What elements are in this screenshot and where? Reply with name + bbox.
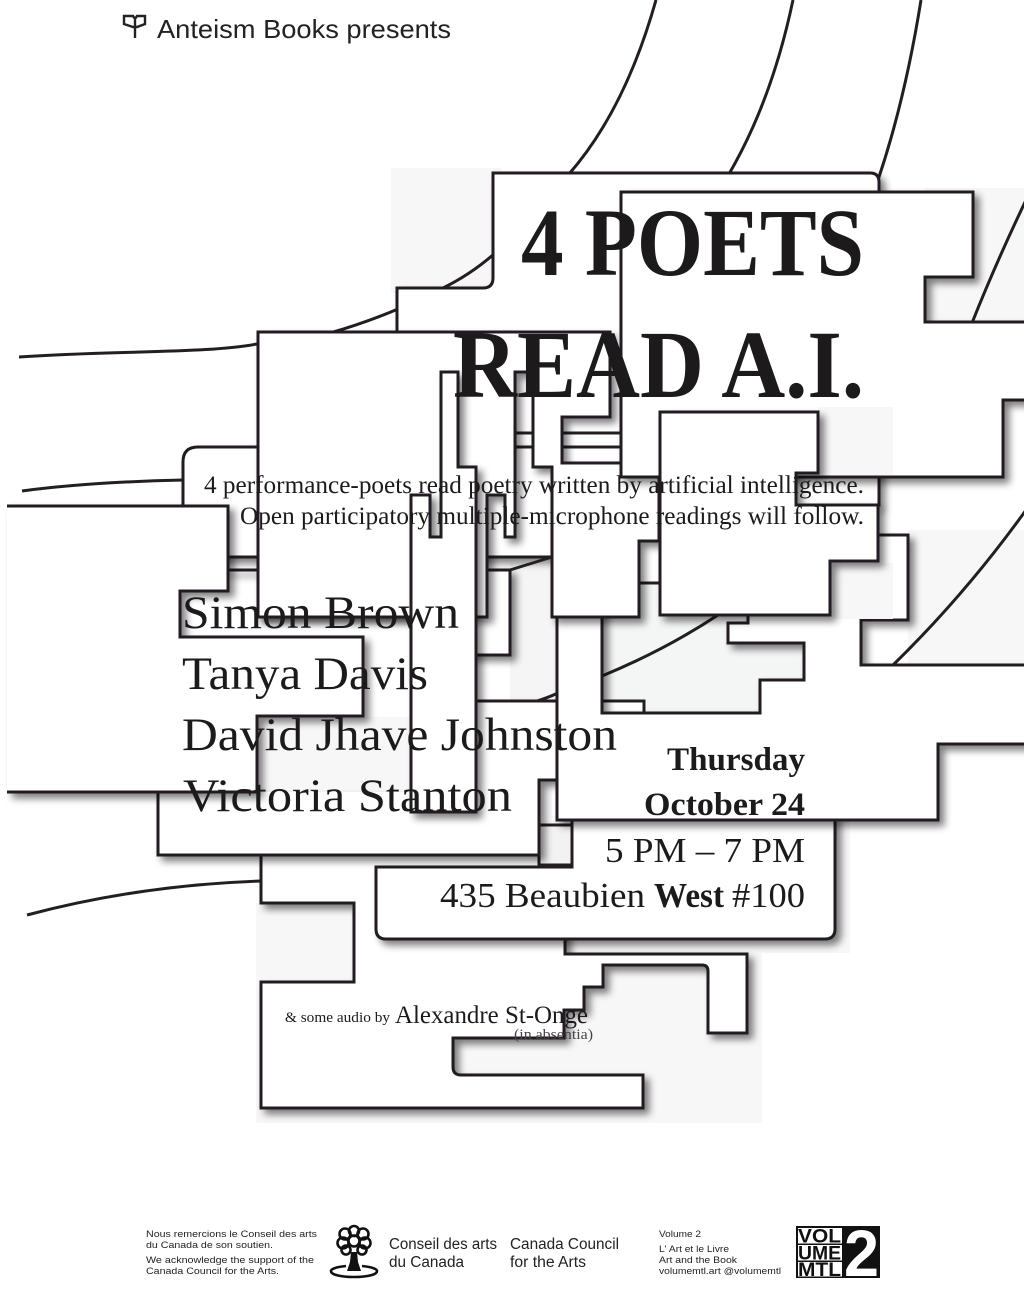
title: READ A.I. (453, 311, 864, 418)
diagonal fold line (510, 557, 552, 570)
icon: Volume MTL 2 logo (796, 1216, 880, 1290)
shape: top right panel (621, 192, 1024, 477)
shape: address box (376, 815, 835, 939)
shape: tall slender panel (411, 372, 476, 812)
footer: acknowledgement text: Nous remercions le Conseil des arts (146, 1229, 317, 1240)
shape: rounded panel behind the description (183, 447, 552, 557)
shape: bottom stepped panel (261, 850, 747, 1108)
poet names: David Jhave Johnston (182, 709, 617, 761)
publisher text: Anteism Books presents (157, 14, 451, 44)
patch of grey beside the date panel (833, 563, 893, 619)
icon: Canada Council tree logo (331, 1226, 377, 1277)
icon: open book on stem (124, 16, 145, 38)
poet names (182, 587, 617, 822)
footer: acknowledgement text (146, 1229, 317, 1277)
event date, time and place: October 24 (644, 787, 805, 823)
footer: Volume 2 text: volumemtl.art @volumemtl (659, 1266, 781, 1277)
audio credit: & some audio by (285, 1010, 391, 1026)
shape: large left panel (7, 506, 363, 792)
footer: Canada Council wordmarks: Canada Council (510, 1236, 619, 1253)
shape: top rounded panel (397, 173, 879, 505)
icon: Volume MTL 2 logo: 2 (844, 1216, 879, 1290)
description: Open participatory multiple-microphone readings will follow. (240, 503, 864, 530)
footer: Canada Council wordmarks: for the Arts (510, 1254, 586, 1271)
small curved edge (537, 693, 558, 701)
footer: Volume 2 text (659, 1229, 781, 1277)
decorative curves behind the shapes (19, 0, 1024, 915)
shape: panel behind the lower names (158, 701, 557, 855)
footer: acknowledgement text: Canada Council for the Arts. (146, 1266, 279, 1277)
audio credit: Alexandre St-Onge (395, 1002, 588, 1029)
event date, time and place (440, 742, 805, 915)
icon: Volume MTL 2 logo: UME (798, 1242, 841, 1264)
footer: Canada Council wordmarks: du Canada (389, 1254, 464, 1271)
patch of grey on the top right panel (818, 407, 893, 475)
header: Anteism Books presents (124, 14, 451, 44)
event date, time and place: 435 Beaubien (440, 876, 645, 915)
description (204, 472, 864, 530)
shape: date panel (557, 535, 1024, 820)
horizontal bands in the slit (500, 433, 640, 447)
description: 4 performance-poets read poetry written by artificial intelligence. (204, 472, 864, 499)
poet names: Tanya Davis (182, 648, 428, 700)
footer: Canada Council wordmarks: Conseil des arts (389, 1236, 497, 1253)
footer: Volume 2 text: Art and the Book (659, 1255, 737, 1266)
shape: large panel with slit (258, 332, 659, 617)
event date, time and place: 5 PM – 7 PM (605, 831, 805, 870)
footer: Canada Council wordmarks (389, 1236, 619, 1271)
audio credit: (in absentia) (514, 1027, 593, 1043)
icon: Volume MTL 2 logo: VOL (798, 1226, 841, 1248)
event date, time and place: Thursday (667, 742, 805, 778)
icon: Volume MTL 2 logo: MTL (798, 1259, 841, 1281)
small white fold between panels (630, 530, 670, 583)
event date, time and place: #100 (732, 876, 805, 915)
footer: acknowledgement text: We acknowledge the support of the (146, 1255, 314, 1266)
small grey fold next to the address box (539, 825, 572, 865)
shape: lower folded panel (183, 570, 510, 655)
title: 4 POETS (521, 189, 864, 296)
footer: acknowledgement text: du Canada de son soutien. (146, 1240, 273, 1251)
poet names: Victoria Stanton (183, 770, 512, 822)
footer: Volume 2 text: L' Art et le Livre (659, 1244, 729, 1255)
audio credit (285, 1002, 593, 1043)
gap inside the date panel (602, 583, 804, 713)
event date, time and place: West (654, 876, 724, 915)
poet names: Simon Brown (182, 587, 459, 639)
faint background patches (228, 168, 1024, 1123)
shape: centre stepped panel (660, 412, 878, 615)
footer: Volume 2 text: Volume 2 (659, 1229, 701, 1240)
title (453, 189, 864, 418)
